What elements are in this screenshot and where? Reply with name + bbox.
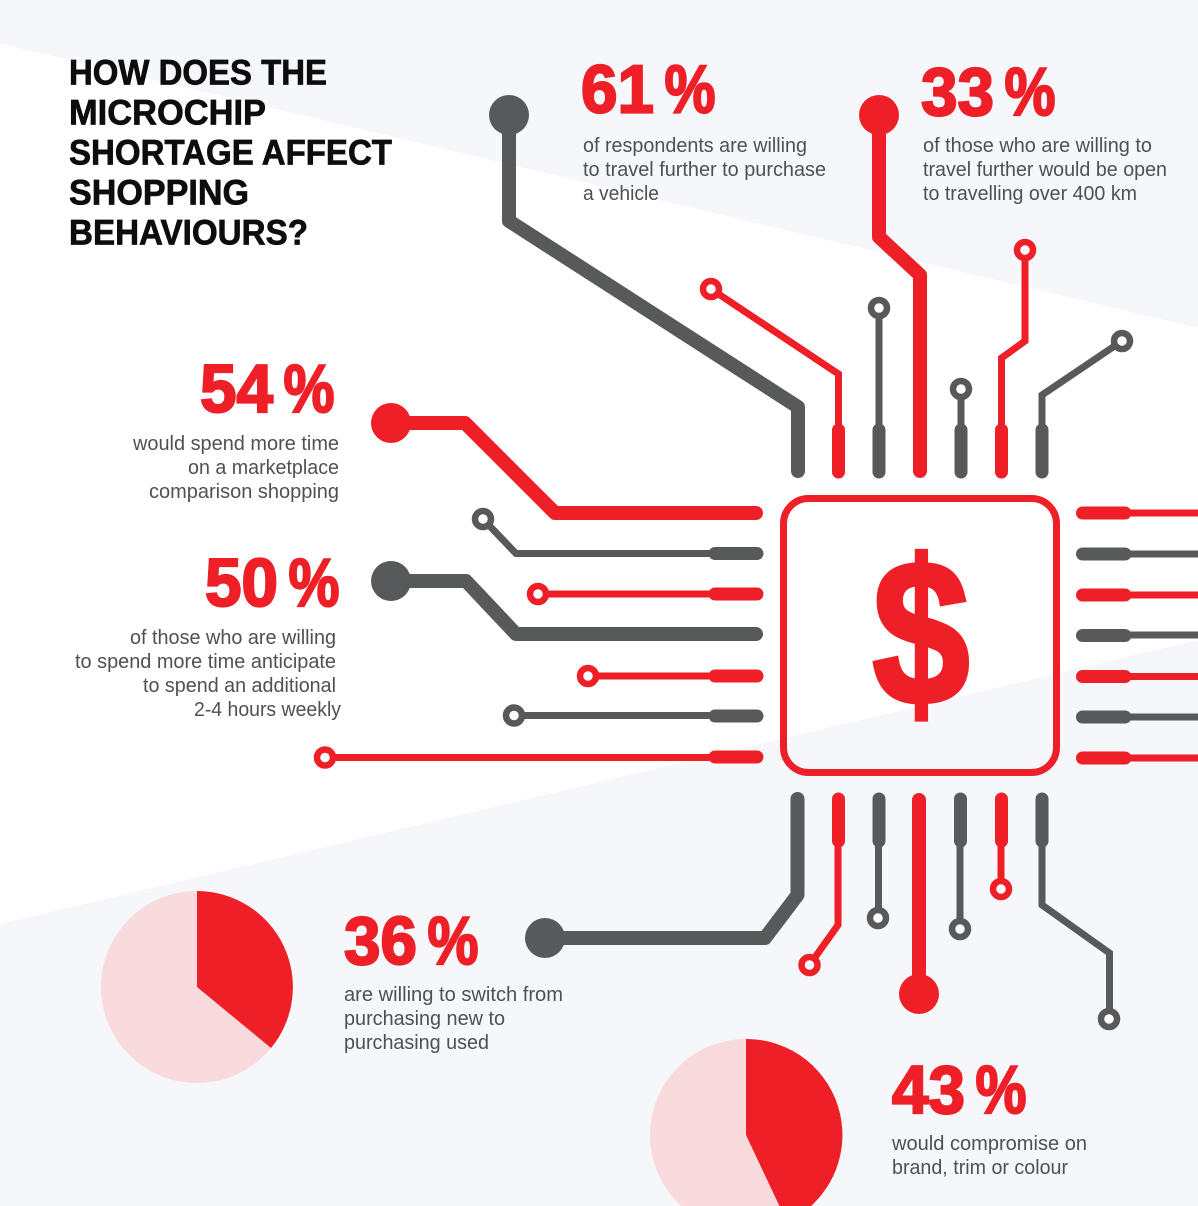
trace: grey thin tall [871,300,887,472]
stat: 54% marketplace: comparison shopping [149,480,339,503]
stat: 33% over 400 km: % [1004,54,1056,130]
stat: 54% marketplace [132,351,339,503]
stat: 50% additional hours: % [288,545,340,621]
stat: 36% new to used [344,903,563,1054]
title [69,54,392,252]
title: BEHAVIOURS? [69,214,308,252]
stat: 36% new to used: are willing to switch from [344,983,563,1006]
trace: grey ring long [952,799,968,937]
stat: 61% travel further: % [664,52,716,128]
trace: grey bent right [1042,799,1117,1027]
trace: grey thick to 36% [525,799,798,958]
stat: 33% over 400 km: to travelling over 400 km [923,182,1137,205]
icon: dollar sign: $ [872,518,970,748]
stat: 54% marketplace: on a marketplace [188,456,339,479]
trace: red thick to 33% [859,95,920,471]
trace: grey thin short [953,381,969,472]
trace: red thin bent [1002,242,1033,472]
stat: 54% marketplace: % [284,351,334,427]
trace: grey thick to 50% [371,561,756,634]
stat: 61% travel further: of respondents are willing [583,134,807,157]
stat: 33% over 400 km: 33 [921,54,994,130]
stat: 50% additional hours [75,545,342,721]
trace: grey thick to 61% [489,95,798,471]
trace: red thick to 54% [371,403,756,513]
trace: grey ring [870,799,886,926]
stat: 43% compromise: brand, trim or colour [892,1156,1068,1179]
stat: 50% additional hours: of those who are willing [130,626,336,649]
stat: 50% additional hours: to spend an additional [143,674,336,697]
microchip body [784,498,1056,772]
stat: 61% travel further: 61 [581,52,654,128]
trace: grey ring upper [475,511,757,554]
traces: top pins [489,95,1130,472]
stat: 61% travel further: to travel further to purchase [583,158,826,181]
stat: 43% compromise: would compromise on [891,1132,1087,1155]
stat: 36% new to used: purchasing used [344,1031,489,1054]
trace: red ring short [580,668,757,684]
title: SHOPPING [69,174,249,212]
traces: right pins [1082,513,1198,758]
stat: 33% over 400 km: of those who are willing to [923,134,1152,157]
stat: 43% compromise: 43 [892,1052,965,1128]
trace: red thick to 43% [899,800,939,1014]
trace: red ring long [317,750,757,766]
traces: bottom pins [525,799,1117,1027]
stat: 36% new to used: purchasing new to [344,1007,505,1030]
stat: 50% additional hours: 2-4 hours weekly [194,698,342,721]
stat: 61% travel further: a vehicle [583,182,659,205]
stat: 43% compromise [891,1052,1087,1179]
trace: red ring short [993,799,1009,897]
stat: 36% new to used: % [428,903,478,979]
pie chart: 43% [650,1039,842,1206]
trace: grey thin right [1042,333,1130,472]
trace: red ring [530,586,757,602]
title: MICROCHIP [69,94,266,132]
stat: 33% over 400 km: travel further would be open [923,158,1167,181]
stat: 33% over 400 km [921,54,1167,205]
pie chart: 36% [101,891,293,1083]
stat: 54% marketplace: would spend more time [132,432,339,455]
stat: 43% compromise: % [976,1052,1026,1128]
traces: left pins [317,403,757,766]
title: HOW DOES THE [69,54,327,92]
stat: 61% travel further [581,52,826,205]
stat: 50% additional hours: 50 [205,545,278,621]
title: SHORTAGE AFFECT [69,134,392,172]
trace: red thin left [703,281,838,472]
stat: 36% new to used: 36 [344,903,417,979]
trace: grey ring lower [506,708,757,724]
stat: 50% additional hours: to spend more time anticipate [75,650,336,673]
stat: 54% marketplace: 54 [200,351,273,427]
trace: red ring left [802,799,838,973]
